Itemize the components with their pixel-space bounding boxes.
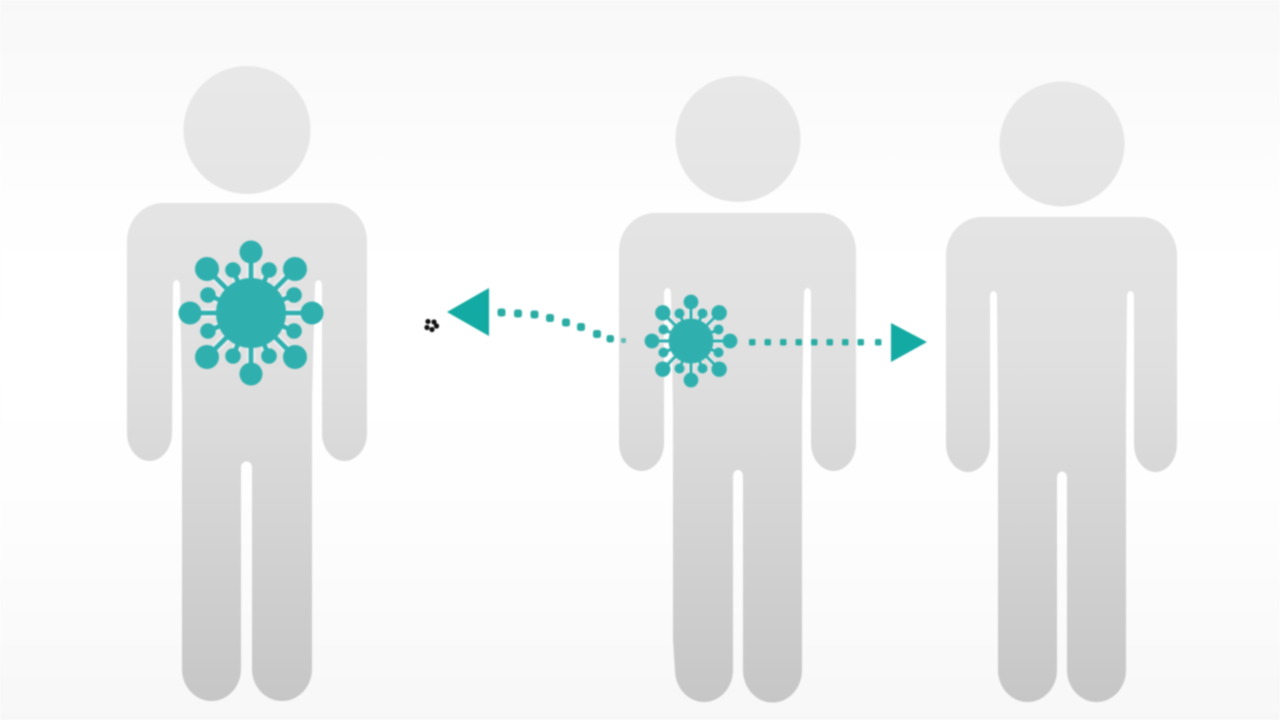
body: middle person xyxy=(619,213,856,703)
dotted line: left arrow xyxy=(498,308,626,343)
head: middle person xyxy=(676,76,800,202)
person: left, infected xyxy=(127,66,367,701)
dotted line: right arrow xyxy=(749,339,882,346)
arrowhead: right xyxy=(891,323,927,362)
head: left person xyxy=(184,66,310,194)
arrowhead: left xyxy=(447,288,489,336)
icon: small virus on middle person xyxy=(645,295,737,387)
arrow: left towards first person xyxy=(447,288,626,343)
icon: busy cursor xyxy=(424,319,439,332)
head: right person xyxy=(1000,82,1124,206)
body: left person xyxy=(127,203,367,701)
body: right person xyxy=(946,217,1177,702)
person: middle, infected xyxy=(619,76,856,703)
icon: large virus on left person xyxy=(178,240,324,386)
arrow: right towards third person xyxy=(749,323,927,362)
person: right, healthy xyxy=(946,82,1177,702)
